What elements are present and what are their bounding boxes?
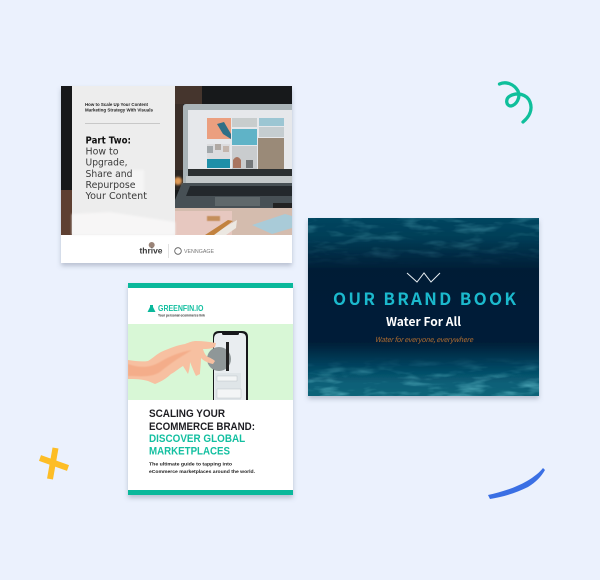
- underwater texture: [308, 218, 539, 396]
- top accent bar: [128, 283, 293, 288]
- icon: green scribble: [500, 83, 531, 122]
- panel: ecommerce guide cover: [128, 283, 293, 495]
- laptop photo: [174, 86, 292, 235]
- icon: blue brush stroke: [488, 468, 545, 499]
- phone and hand illustration: [128, 331, 248, 400]
- report kicker text: Marketing Strategy With Visuals: [85, 107, 154, 112]
- panel: content marketing report cover: [61, 86, 292, 263]
- logo separator: [167, 244, 170, 258]
- guide title: MARKETPLACES: [149, 446, 230, 458]
- brand book tagline: Water for everyone, everywhere: [375, 335, 474, 345]
- report title: Share and: [86, 169, 132, 180]
- report title: Your Content: [85, 191, 147, 202]
- report title: How to: [86, 147, 119, 158]
- guide subtitle: The ultimate guide to tapping into: [149, 462, 232, 468]
- hand: [128, 341, 216, 384]
- brand book title: OUR BRAND BOOK: [333, 285, 516, 310]
- venngage logo: [175, 248, 214, 255]
- guide subtitle: eCommerce marketplaces around the world.: [149, 469, 256, 475]
- report kicker text: How to Scale Up Your Content: [85, 102, 149, 107]
- icon: yellow cross: [40, 448, 68, 479]
- venngage logo: VENNGAGE: [184, 249, 214, 255]
- translucent text panel: [72, 86, 175, 235]
- guide title: DISCOVER GLOBAL: [149, 433, 245, 445]
- thrive logo: thrive: [140, 246, 163, 256]
- bottom accent bar: [128, 490, 293, 495]
- wave logo: [407, 273, 440, 282]
- thrive logo: [140, 242, 163, 256]
- green image band: [128, 324, 293, 400]
- left dark photo strip: [61, 86, 72, 235]
- panel: brand book cover: [308, 218, 539, 396]
- report title: Repurpose: [86, 180, 136, 191]
- brand book subtitle: Water For All: [386, 313, 461, 330]
- report title: Upgrade,: [86, 158, 128, 169]
- greenfin logo: Your personal ecommerce link: [158, 313, 206, 317]
- report title: Part Two:: [86, 136, 131, 146]
- divider rule: [85, 122, 160, 125]
- guide title: ECOMMERCE BRAND:: [149, 421, 255, 433]
- phone: [207, 331, 248, 400]
- guide title: SCALING YOUR: [149, 408, 225, 420]
- greenfin logo: GREENFIN.IO: [158, 304, 204, 313]
- greenfin logo: [148, 304, 206, 317]
